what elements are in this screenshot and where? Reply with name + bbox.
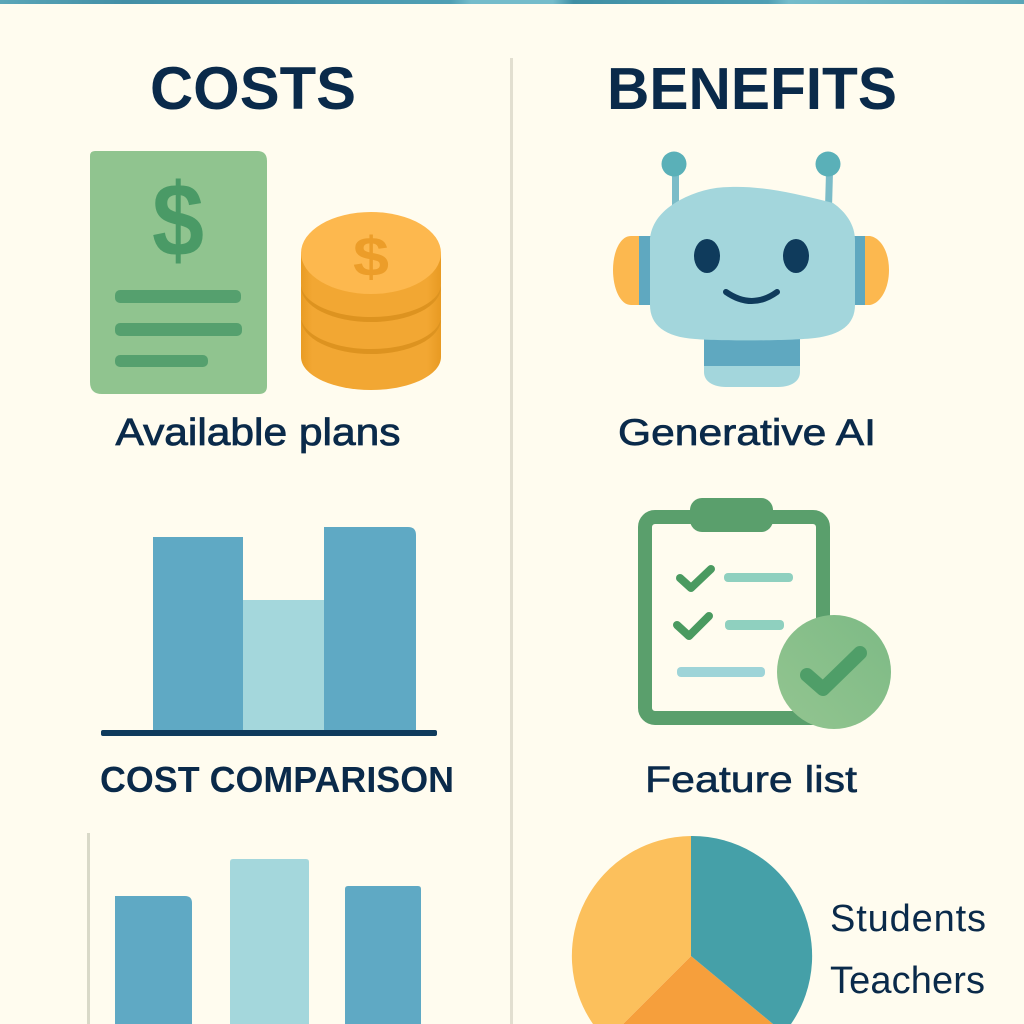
label: feature list: Feature list: [645, 759, 858, 800]
label: generative ai: Generative AI: [618, 412, 876, 453]
icon: coin stack: $: [353, 225, 389, 288]
chart: cost comparison bars: [101, 527, 437, 736]
icon: bill with dollar sign: [90, 151, 267, 394]
heading: benefits: BENEFITS: [607, 56, 897, 122]
icon: coin stack: [301, 212, 441, 390]
legend: teachers: Teachers: [830, 960, 985, 1002]
icon: bill with dollar sign: $: [152, 163, 204, 279]
icon: robot: [613, 152, 889, 387]
label: available plans: Available plans: [116, 412, 400, 454]
top edge band: [0, 0, 1024, 4]
chart: lower left bars: [87, 833, 421, 1024]
legend: students: Students: [830, 898, 986, 940]
label: cost comparison: COST COMPARISON: [100, 759, 454, 800]
heading: costs: COSTS: [150, 55, 356, 122]
chart: pie of users: [572, 836, 812, 1024]
icon: clipboard feature list: [645, 498, 891, 729]
